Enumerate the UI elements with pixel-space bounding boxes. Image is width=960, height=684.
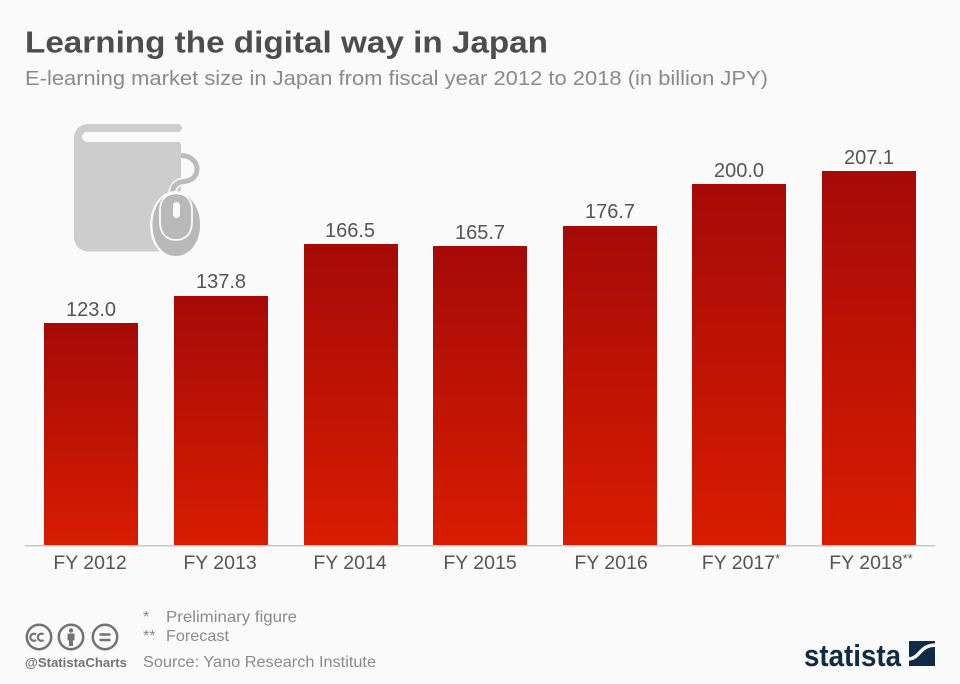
logo mark bbox=[909, 641, 935, 666]
footnotes and source: Preliminary figure bbox=[166, 609, 297, 626]
category labels: FY 2012 bbox=[53, 552, 127, 574]
mouse wheel bbox=[173, 202, 180, 218]
footnotes and source: ** bbox=[143, 628, 155, 645]
value labels: 165.7 bbox=[455, 222, 505, 244]
book bbox=[74, 124, 182, 252]
category labels: * bbox=[775, 551, 780, 566]
value labels: 200.0 bbox=[714, 160, 764, 182]
mouse cable bbox=[172, 156, 197, 196]
mouse button outline bbox=[160, 194, 192, 240]
value labels: 137.8 bbox=[196, 271, 246, 293]
bar: FY 2012 bbox=[44, 323, 138, 545]
bar: FY 2017 bbox=[692, 184, 786, 545]
icon: book with computer mouse bbox=[74, 124, 201, 258]
category labels: FY 2014 bbox=[313, 552, 387, 574]
category labels: FY 2013 bbox=[183, 552, 257, 574]
footnotes and source: * bbox=[143, 609, 149, 626]
bar: FY 2013 bbox=[174, 296, 268, 545]
title: Learning the digital way in Japan bbox=[25, 24, 548, 60]
category labels: FY 2017 bbox=[702, 552, 775, 574]
footnotes and source: Forecast bbox=[166, 628, 230, 645]
statista logo bbox=[804, 638, 936, 673]
social handle: @StatistaCharts bbox=[25, 655, 127, 670]
category labels: FY 2018 bbox=[829, 552, 903, 574]
value labels: 176.7 bbox=[585, 201, 635, 223]
category labels bbox=[53, 551, 913, 574]
footnotes and source: Source: Yano Research Institute bbox=[143, 654, 376, 671]
bar: FY 2014 bbox=[304, 244, 398, 545]
value labels: 123.0 bbox=[66, 299, 116, 321]
category labels: FY 2016 bbox=[574, 552, 648, 574]
value labels: 207.1 bbox=[844, 147, 894, 169]
category labels: FY 2015 bbox=[443, 552, 517, 574]
bar: FY 2015 bbox=[433, 246, 527, 545]
footnotes and source bbox=[143, 609, 376, 671]
logo wordmark: statista bbox=[804, 638, 902, 673]
bar chart bbox=[25, 147, 935, 574]
x axis line bbox=[25, 545, 935, 546]
subtitle: E-learning market size in Japan from fiscal year 2012 to 2018 (in billion JPY) bbox=[25, 67, 768, 90]
bar: FY 2016 bbox=[563, 226, 657, 545]
mouse body bbox=[150, 191, 201, 258]
icon: creative commons badges bbox=[27, 625, 117, 649]
value labels: 166.5 bbox=[325, 220, 375, 242]
category labels: ** bbox=[903, 551, 913, 566]
bar: FY 2018 bbox=[822, 171, 916, 545]
value labels bbox=[66, 147, 894, 321]
